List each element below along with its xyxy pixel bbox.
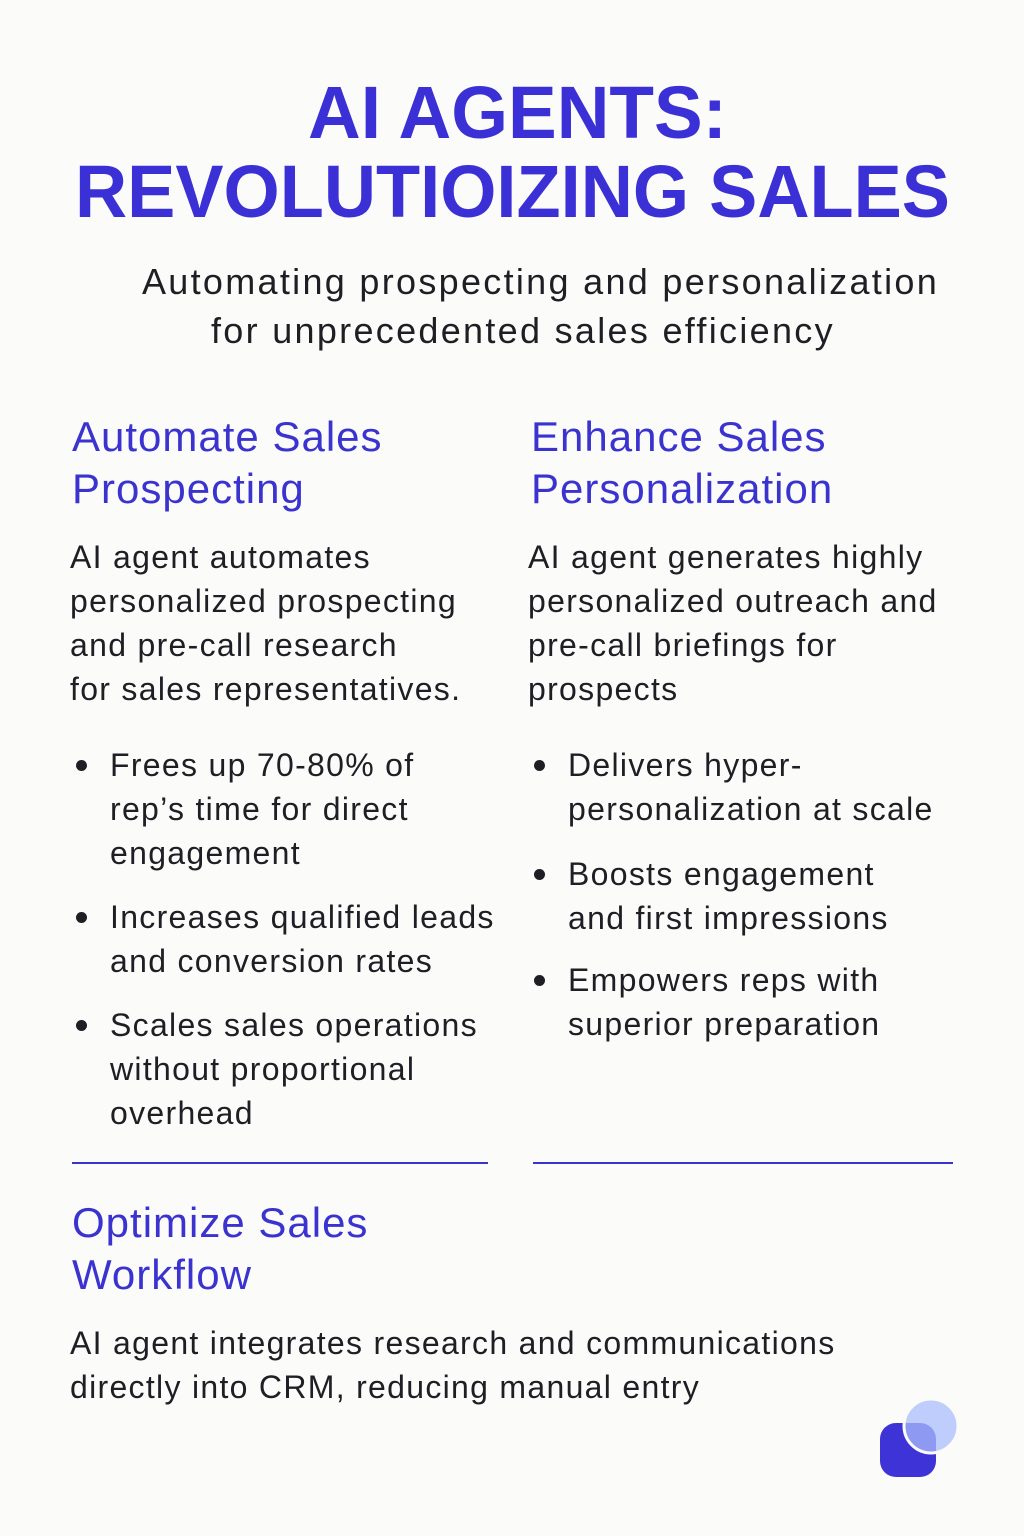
heading: Personalization — [531, 465, 833, 512]
subtitle: Automating prospecting and personalization — [142, 261, 939, 302]
body text — [528, 539, 938, 707]
body text: directly into CRM, reducing manual entry — [70, 1369, 700, 1405]
bullet list: superior preparation — [568, 1006, 880, 1042]
bullet list: Empowers reps with — [568, 962, 880, 998]
body text: personalized outreach and — [528, 583, 938, 619]
body text: and pre-call research — [70, 627, 398, 663]
body text: pre-call briefings for — [528, 627, 838, 663]
title: AI AGENTS: — [308, 71, 727, 154]
panel: enhance sales personalization — [528, 413, 938, 1042]
icon: logo — [880, 1400, 956, 1477]
title — [75, 71, 950, 233]
bullet list: Delivers hyper- — [568, 747, 803, 783]
title: REVOLUTIOIZING SALES — [75, 150, 950, 233]
heading: Optimize Sales — [72, 1199, 368, 1246]
subtitle: for unprecedented sales efficiency — [211, 310, 835, 351]
bullet list — [534, 747, 934, 1042]
bullet list: Boosts engagement — [568, 856, 875, 892]
body text — [70, 539, 461, 707]
heading: Prospecting — [72, 465, 305, 512]
panel: optimize sales workflow — [70, 1199, 836, 1405]
heading: Workflow — [72, 1251, 252, 1298]
body text — [70, 1325, 836, 1405]
bullet list: and first impressions — [568, 900, 889, 936]
heading — [531, 413, 833, 512]
subtitle — [142, 261, 939, 351]
bullet list — [76, 747, 495, 1131]
bullet list: without proportional — [110, 1051, 415, 1087]
bullet list: engagement — [110, 835, 301, 871]
panel: automate sales prospecting — [70, 413, 495, 1131]
bullet list: Increases qualified leads — [110, 899, 495, 935]
bullet list: rep’s time for direct — [110, 791, 409, 827]
bullet list: personalization at scale — [568, 791, 934, 827]
bullet list: Scales sales operations — [110, 1007, 478, 1043]
bullet list: Frees up 70-80% of — [110, 747, 414, 783]
heading — [72, 413, 383, 512]
body text: personalized prospecting — [70, 583, 457, 619]
body text: AI agent generates highly — [528, 539, 923, 575]
body text: AI agent automates — [70, 539, 371, 575]
heading: Enhance Sales — [531, 413, 827, 460]
bullet list: and conversion rates — [110, 943, 433, 979]
body text: for sales representatives. — [70, 671, 461, 707]
body text: prospects — [528, 671, 678, 707]
body text: AI agent integrates research and communications — [70, 1325, 836, 1361]
bullet list: overhead — [110, 1095, 254, 1131]
heading: Automate Sales — [72, 413, 383, 460]
heading — [72, 1199, 368, 1298]
